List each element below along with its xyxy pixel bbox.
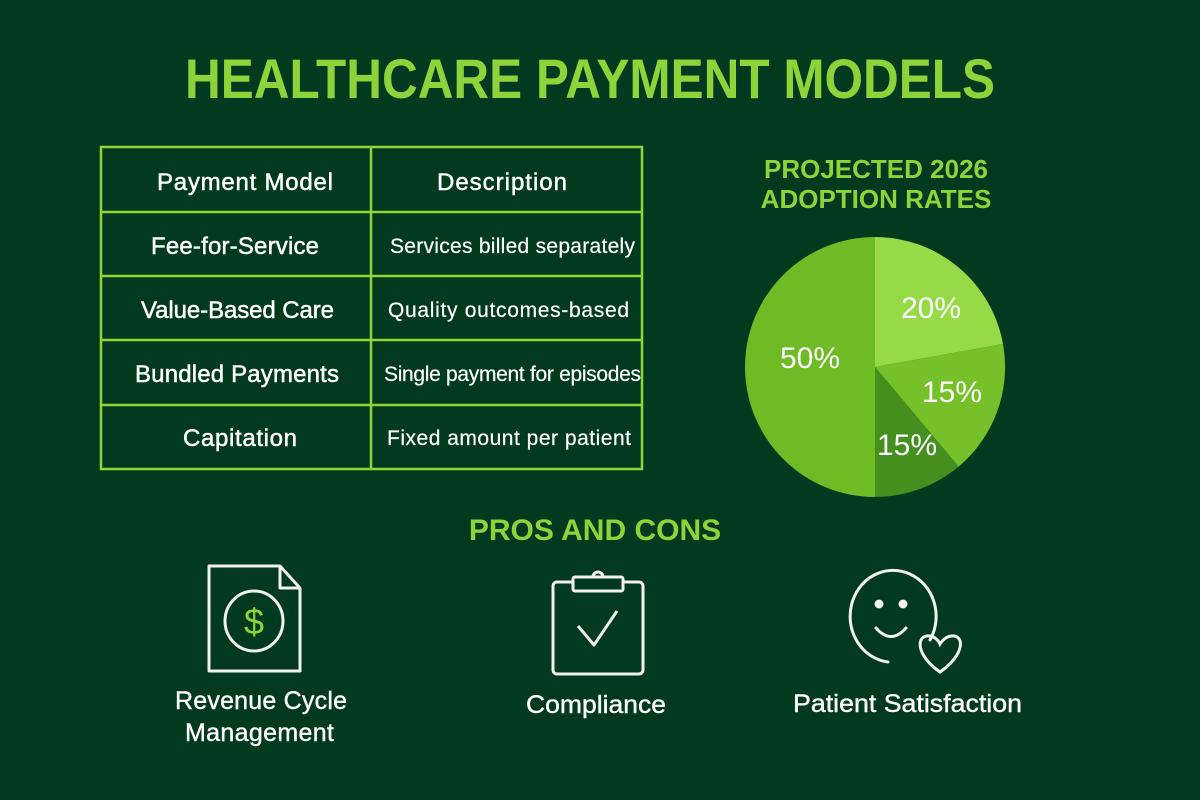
label: revenue cycle management: Management (185, 719, 334, 747)
pie chart: 15% (922, 376, 982, 409)
row: fee-for-service: Services billed separately (390, 235, 636, 258)
pie chart: 15% (877, 429, 937, 462)
label: patient satisfaction: Patient Satisfaction (793, 690, 1022, 718)
pros and cons heading: PROS AND CONS (469, 514, 721, 547)
row: capitation: Capitation (183, 425, 297, 452)
row: fee-for-service (151, 233, 636, 260)
row: value-based care: Quality outcomes-based (388, 299, 629, 322)
icon: revenue document (209, 566, 300, 671)
pie chart: 50% (780, 342, 840, 375)
label: revenue cycle management (175, 687, 347, 747)
label: revenue cycle management: Revenue Cycle (175, 687, 347, 715)
row: bundled payments: Bundled Payments (135, 361, 339, 388)
row: bundled payments (135, 361, 641, 388)
table: payment models (101, 147, 642, 469)
label: compliance: Compliance (526, 691, 666, 719)
pie heading (761, 154, 991, 214)
icon: revenue document: $ (244, 601, 264, 642)
pie heading: ADOPTION RATES (761, 184, 991, 214)
icon: clipboard check (553, 572, 643, 674)
pie chart: 20% (901, 292, 961, 325)
row: bundled payments: Single payment for episodes (384, 363, 641, 386)
row: capitation: Fixed amount per patient (387, 427, 631, 450)
row: fee-for-service: Fee-for-Service (151, 233, 319, 260)
row: value-based care: Value-Based Care (141, 297, 334, 324)
header row: Payment Model (157, 169, 333, 196)
title: HEALTHCARE PAYMENT MODELS (185, 47, 995, 110)
row: value-based care (141, 297, 629, 324)
icon: smiley with heart (850, 570, 960, 672)
pie chart (745, 237, 1005, 497)
pie heading: PROJECTED 2026 (764, 154, 988, 184)
row: capitation (183, 425, 631, 452)
header row: Description (437, 169, 567, 196)
header row (157, 169, 567, 196)
